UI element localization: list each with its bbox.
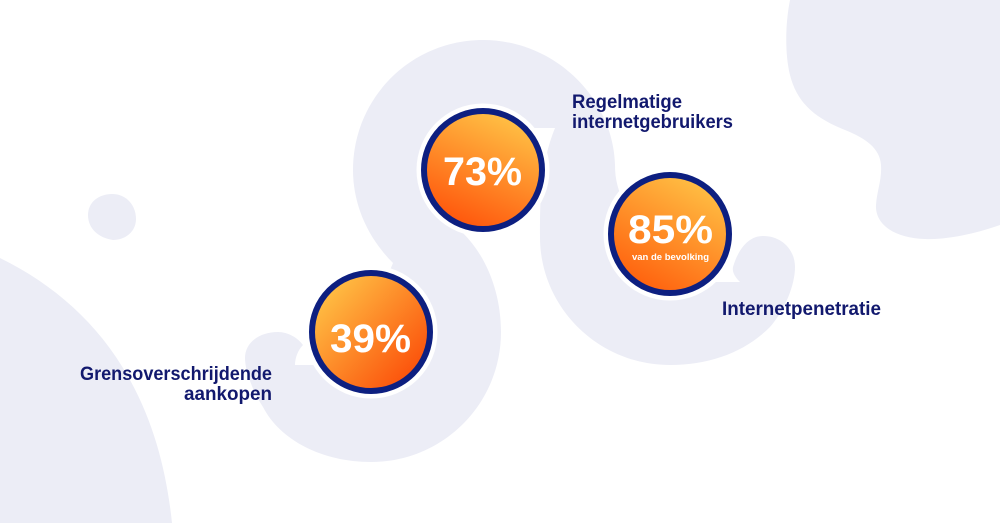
label: Grensoverschrijdende aankopen: Grensoverschrijdende	[80, 364, 272, 385]
stat circle: 85% van de bevolking: 85%	[628, 208, 713, 252]
stat circle: 39%	[304, 266, 438, 398]
label: Regelmatige internetgebruikers	[572, 92, 733, 133]
stat circle: 85% van de bevolking	[604, 168, 736, 300]
label: Internetpenetratie: Internetpenetratie	[722, 299, 881, 320]
label: Grensoverschrijdende aankopen	[80, 364, 272, 405]
S-shaped ribbon connecting the circles	[245, 40, 795, 462]
background blob: bottom left	[0, 258, 172, 523]
stat circle: 85% van de bevolking: van de bevolking	[632, 252, 709, 263]
stat circle: 73%: 73%	[443, 150, 522, 194]
stat circle: 73%	[416, 104, 550, 236]
label: Regelmatige internetgebruikers: internetgebruikers	[572, 112, 733, 133]
stat circle: 39%: 39%	[330, 317, 411, 361]
background blob: small left	[88, 194, 136, 240]
label: Regelmatige internetgebruikers: Regelmatige	[572, 92, 682, 113]
label: Grensoverschrijdende aankopen: aankopen	[184, 384, 272, 405]
background blob: top right	[786, 0, 1000, 239]
